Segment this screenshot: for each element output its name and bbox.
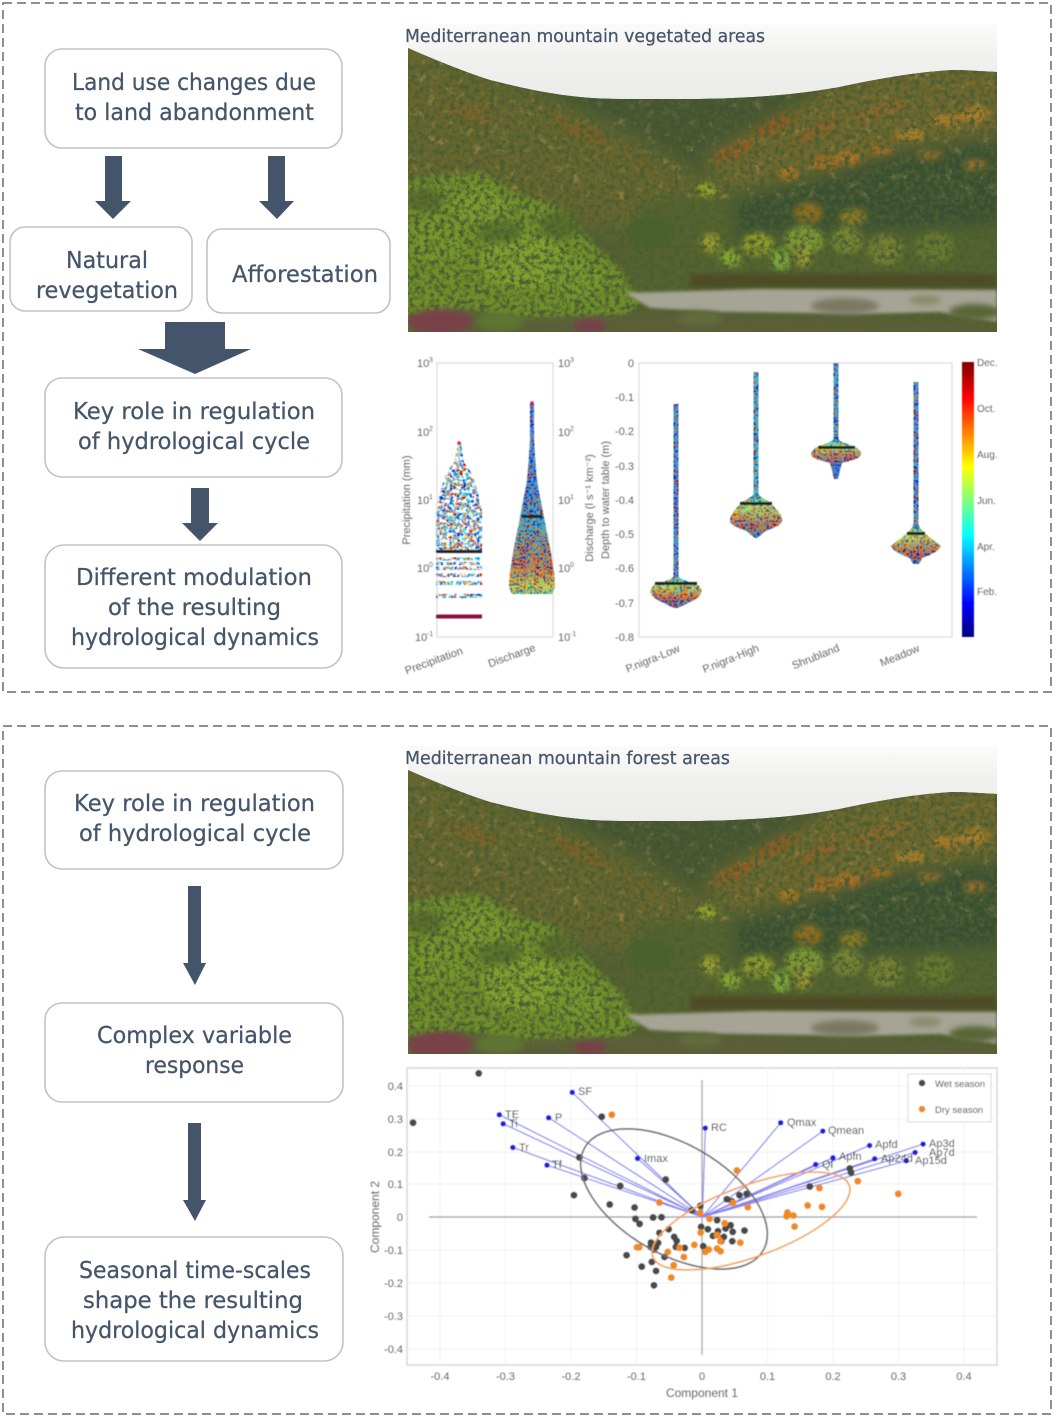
- variable labels: Ap15d: [915, 1155, 947, 1167]
- axis labels: -0.4: [384, 1344, 403, 1356]
- axis labels: right chart: [600, 358, 921, 676]
- box: land use changes: [45, 49, 342, 148]
- box: seasonal time-scales: Seasonal time-scales: [79, 1258, 311, 1284]
- variable labels: Ap7d: [929, 1147, 955, 1159]
- axis labels: -0.2: [562, 1371, 580, 1383]
- variable labels: Apfd: [875, 1139, 898, 1151]
- axis labels: right chart: Depth to water table (m): [600, 441, 612, 559]
- axis labels: 0.2: [825, 1371, 841, 1383]
- violin: discharge: [508, 400, 556, 595]
- colour bar: months: Jun.: [977, 496, 996, 507]
- axis labels: left chart: Precipitation: [403, 645, 464, 677]
- arrow: to natural revegetation: [95, 156, 131, 219]
- axis labels: left chart: 2: [429, 426, 433, 433]
- axis labels: left chart: 10: [417, 358, 429, 370]
- axis labels: 0.4: [956, 1371, 972, 1383]
- axis labels: 0.4: [388, 1081, 403, 1093]
- axis labels: 0: [397, 1212, 403, 1224]
- panel: vegetated areas: [3, 3, 1051, 692]
- arrow: to seasonal time-scales: [183, 1123, 206, 1221]
- box: different modulation: of the resulting: [108, 595, 281, 621]
- variable labels: Qmean: [828, 1125, 864, 1137]
- box: seasonal time-scales: hydrological dynamics: [71, 1318, 319, 1344]
- axis labels: left chart: 3: [429, 357, 433, 364]
- axis labels: [368, 1081, 972, 1400]
- chart: precipitation and discharge violins: [401, 357, 596, 677]
- axis labels: left chart: -1: [427, 631, 433, 638]
- colour bar: months: Feb.: [977, 587, 997, 598]
- violin: P.nigra-Low: [650, 403, 702, 609]
- ellipse: wet season: [557, 1100, 791, 1298]
- colour bar: months: Oct.: [977, 404, 995, 415]
- axis labels: left chart: 0: [429, 562, 433, 569]
- axis labels: 0.1: [760, 1371, 775, 1383]
- box: afforestation: Afforestation: [232, 262, 378, 288]
- ellipse: dry season: [641, 1152, 861, 1290]
- axis labels: left chart: 10: [558, 563, 570, 575]
- axis labels: right chart: -0.5: [615, 529, 634, 541]
- variable labels: P: [555, 1112, 562, 1124]
- loading vectors: [413, 1073, 923, 1285]
- variable labels: [505, 1086, 955, 1171]
- variable labels: TE: [505, 1109, 519, 1121]
- axis labels: -0.4: [431, 1371, 449, 1383]
- variable labels: Ql: [822, 1159, 833, 1171]
- axis labels: -0.1: [384, 1245, 403, 1257]
- axis labels: -0.3: [384, 1311, 403, 1323]
- axis labels: left chart: 1: [429, 494, 433, 501]
- axis labels: right chart: -0.6: [615, 563, 634, 575]
- colour bar: months: [962, 358, 998, 637]
- points: dry season: [612, 1115, 898, 1278]
- axis labels: left chart: -1: [570, 631, 576, 638]
- variable labels: Imax: [644, 1153, 668, 1165]
- box: natural revegetation: [10, 227, 192, 311]
- box: afforestation: [207, 229, 390, 313]
- axis labels: left chart: 10: [558, 358, 570, 370]
- box: different modulation: [45, 545, 342, 668]
- points: wet season: [413, 1073, 851, 1285]
- axis labels: -0.3: [496, 1371, 515, 1383]
- box: seasonal time-scales: [45, 1237, 343, 1361]
- axis labels: left chart: 2: [570, 426, 574, 433]
- variable labels: RC: [711, 1122, 727, 1134]
- axis labels: right chart: -0.2: [615, 426, 634, 438]
- violin: precipitation: [435, 440, 483, 620]
- variable labels: Tf: [552, 1159, 563, 1171]
- arrow: large down arrow: [138, 322, 251, 374]
- box: land use changes: to land abandonment: [75, 100, 314, 126]
- arrow: to afforestation: [259, 156, 294, 219]
- variable labels: Tr: [519, 1142, 529, 1154]
- axis labels: 0: [699, 1371, 705, 1383]
- box: natural revegetation: revegetation: [36, 278, 178, 304]
- axis labels: left chart: 10: [558, 632, 570, 644]
- axis labels: left chart: Discharge: [487, 642, 537, 670]
- box: key role in regulation: of hydrological cycle: [78, 429, 310, 455]
- box: key role in regulation: [45, 771, 343, 869]
- axis labels: Component 2: [368, 1181, 382, 1253]
- axis labels: left chart: 10: [558, 427, 570, 439]
- legend: Wet season: [935, 1079, 985, 1090]
- legend: Dry season: [935, 1105, 983, 1116]
- axis labels: 0.2: [388, 1147, 403, 1159]
- box: natural revegetation: Natural: [66, 248, 148, 274]
- colour bar: months: Apr.: [977, 542, 995, 553]
- variable labels: Ti: [509, 1118, 518, 1130]
- axis labels: left chart: 10: [415, 632, 427, 644]
- axis labels: right chart: -0.8: [615, 632, 634, 644]
- chart: PCA biplot: [368, 1068, 997, 1400]
- photo: mountain valley in autumn: [400, 24, 1005, 340]
- axis labels: right chart: P.nigra-High: [701, 642, 761, 676]
- legend: [908, 1074, 991, 1122]
- axis labels: right chart: Meadow: [878, 643, 921, 670]
- colour bar: months: Dec.: [977, 358, 998, 369]
- variable labels: Qmax: [787, 1117, 817, 1129]
- box: key role in regulation: Key role in regulation: [74, 791, 315, 817]
- points: loadings: [499, 1092, 923, 1165]
- violin: Meadow: [890, 381, 942, 565]
- violin: P.nigra-High: [729, 371, 783, 539]
- violin: Shrubland: [810, 362, 862, 480]
- box: different modulation: hydrological dynamics: [71, 625, 319, 651]
- axis labels: left chart: Discharge (l s⁻¹ km⁻²): [584, 454, 596, 562]
- axis labels: left chart: 10: [417, 563, 429, 575]
- axis labels: left chart: [401, 357, 596, 677]
- arrow: to different modulation: [182, 488, 218, 541]
- axis labels: -0.2: [384, 1278, 403, 1290]
- box: complex variable response: [45, 1003, 343, 1102]
- axis labels: left chart: 3: [570, 357, 574, 364]
- axis labels: -0.1: [627, 1371, 646, 1383]
- box: different modulation: Different modulation: [76, 565, 312, 591]
- variable labels: Apfn: [839, 1151, 862, 1163]
- axis labels: left chart: 1: [570, 494, 574, 501]
- box: complex variable response: response: [145, 1053, 244, 1079]
- panel: forest areas: [3, 726, 1051, 1414]
- box: key role in regulation: Key role in regulation: [73, 399, 315, 425]
- axis labels: right chart: -0.1: [615, 392, 634, 404]
- axis labels: left chart: 10: [558, 495, 570, 507]
- heading: vegetated areas: Mediterranean mountain vegetated areas: [405, 26, 765, 47]
- heading: forest areas: Mediterranean mountain forest areas: [405, 748, 730, 769]
- box: land use changes: Land use changes due: [72, 70, 316, 96]
- photo: mountain valley in autumn: [400, 746, 1005, 1062]
- variable labels: SF: [578, 1086, 592, 1098]
- variable labels: Ap24d: [881, 1153, 913, 1165]
- axis labels: right chart: -0.3: [615, 461, 634, 473]
- axis labels: left chart: 0: [570, 562, 574, 569]
- axis labels: 0.3: [388, 1114, 403, 1126]
- axis labels: left chart: 10: [417, 495, 429, 507]
- axis labels: left chart: Precipitation (mm): [401, 455, 413, 545]
- chart: depth to water table violins: [600, 358, 998, 676]
- arrow: to complex response: [183, 886, 206, 985]
- box: seasonal time-scales: shape the resulting: [83, 1288, 303, 1314]
- axis labels: right chart: P.nigra-Low: [624, 643, 682, 676]
- axis labels: right chart: Shrubland: [790, 642, 841, 672]
- colour bar: months: Aug.: [977, 450, 998, 461]
- box: key role in regulation: [45, 378, 342, 477]
- box: key role in regulation: of hydrological cycle: [79, 821, 311, 847]
- axis labels: 0.3: [891, 1371, 906, 1383]
- box: complex variable response: Complex variable: [97, 1023, 292, 1049]
- axis labels: Component 1: [666, 1386, 738, 1400]
- axis labels: right chart: -0.7: [615, 598, 634, 610]
- variable labels: Ap3d: [929, 1138, 955, 1150]
- axis labels: left chart: 10: [417, 427, 429, 439]
- axis labels: 0.1: [388, 1179, 403, 1191]
- axis labels: right chart: -0.4: [615, 495, 634, 507]
- axis labels: right chart: 0: [628, 358, 634, 370]
